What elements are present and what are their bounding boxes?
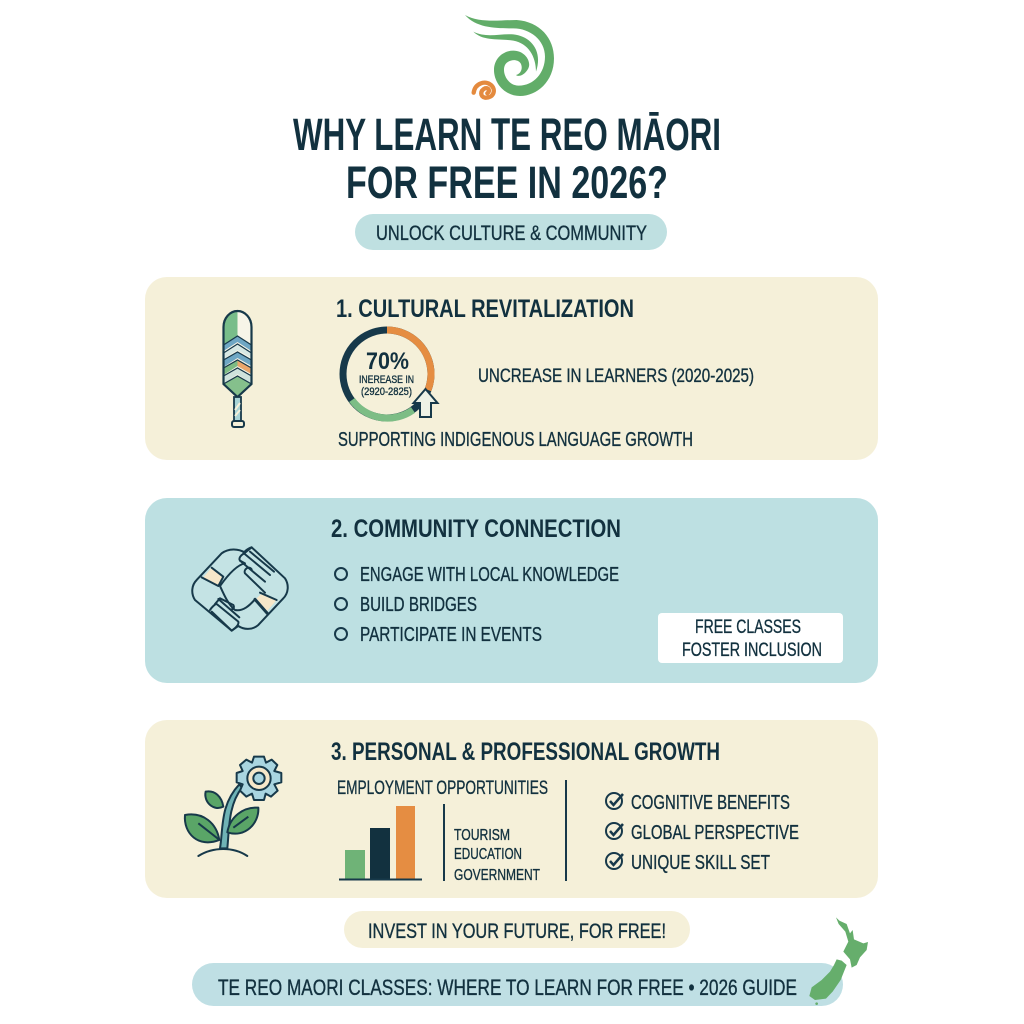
- call to action pill: INVEST IN YOUR FUTURE, FOR FREE!: [368, 920, 666, 943]
- callout: free classes: FREE CLASSES: [695, 617, 801, 638]
- icon: carved paddle: [224, 311, 252, 427]
- checklist: COGNITIVE BENEFITS: [631, 792, 790, 814]
- sector list: TOURISM: [454, 827, 510, 844]
- bullet list: BUILD BRIDGES: [360, 594, 477, 616]
- call to action pill: [344, 911, 690, 948]
- sector list: GOVERNMENT: [454, 867, 540, 884]
- bullet list: PARTICIPATE IN EVENTS: [360, 624, 542, 646]
- title: [293, 109, 721, 208]
- bullet list: ENGAGE WITH LOCAL KNOWLEDGE: [360, 564, 619, 586]
- icon: linked hands: [192, 547, 288, 631]
- heading: 1. CULTURAL REVITALIZATION: [336, 295, 634, 323]
- heading: 3. PERSONAL & PROFESSIONAL GROWTH: [331, 738, 720, 766]
- supporting text: SUPPORTING INDIGENOUS LANGUAGE GROWTH: [338, 429, 693, 451]
- title: WHY LEARN TE REO MĀORI: [293, 109, 721, 160]
- donut chart: 70%: INEREASE IN: [359, 374, 414, 386]
- donut chart: 70%: 70%: [366, 348, 409, 375]
- checklist: GLOBAL PERSPECTIVE: [631, 822, 799, 844]
- logo: koru swirl: [465, 15, 554, 98]
- callout: free classes: [658, 613, 843, 663]
- sector list: [454, 827, 540, 884]
- bullet list: [335, 564, 619, 646]
- bar chart: [339, 806, 422, 880]
- checklist: [606, 792, 799, 874]
- callout: free classes: FOSTER INCLUSION: [682, 640, 822, 661]
- donut chart: 70%: (2920-2825): [361, 386, 412, 398]
- footer pill: TE REO MAORI CLASSES: WHERE TO LEARN FOR FREE • 2026 GUIDE: [218, 975, 797, 1000]
- heading: 2. COMMUNITY CONNECTION: [331, 515, 621, 543]
- checklist: UNIQUE SKILL SET: [631, 852, 770, 874]
- employment label: EMPLOYMENT OPPORTUNITIES: [337, 778, 548, 799]
- learners label: UNCREASE IN LEARNERS (2020-2025): [478, 366, 754, 387]
- icon: New Zealand map: [809, 917, 868, 1005]
- panel: personal and professional growth: [145, 720, 878, 898]
- donut chart: 70%: [343, 330, 438, 418]
- footer pill: [192, 963, 843, 1006]
- subtitle pill: UNLOCK CULTURE & COMMUNITY: [376, 222, 647, 245]
- title: FOR FREE IN 2026?: [346, 157, 668, 208]
- icon: up arrow: [414, 389, 438, 417]
- panel: community connection: [145, 498, 878, 683]
- panel: cultural revitalization: [145, 277, 878, 460]
- subtitle pill: [355, 214, 667, 250]
- icon: sapling with gear: [185, 757, 281, 856]
- sector list: EDUCATION: [454, 846, 522, 863]
